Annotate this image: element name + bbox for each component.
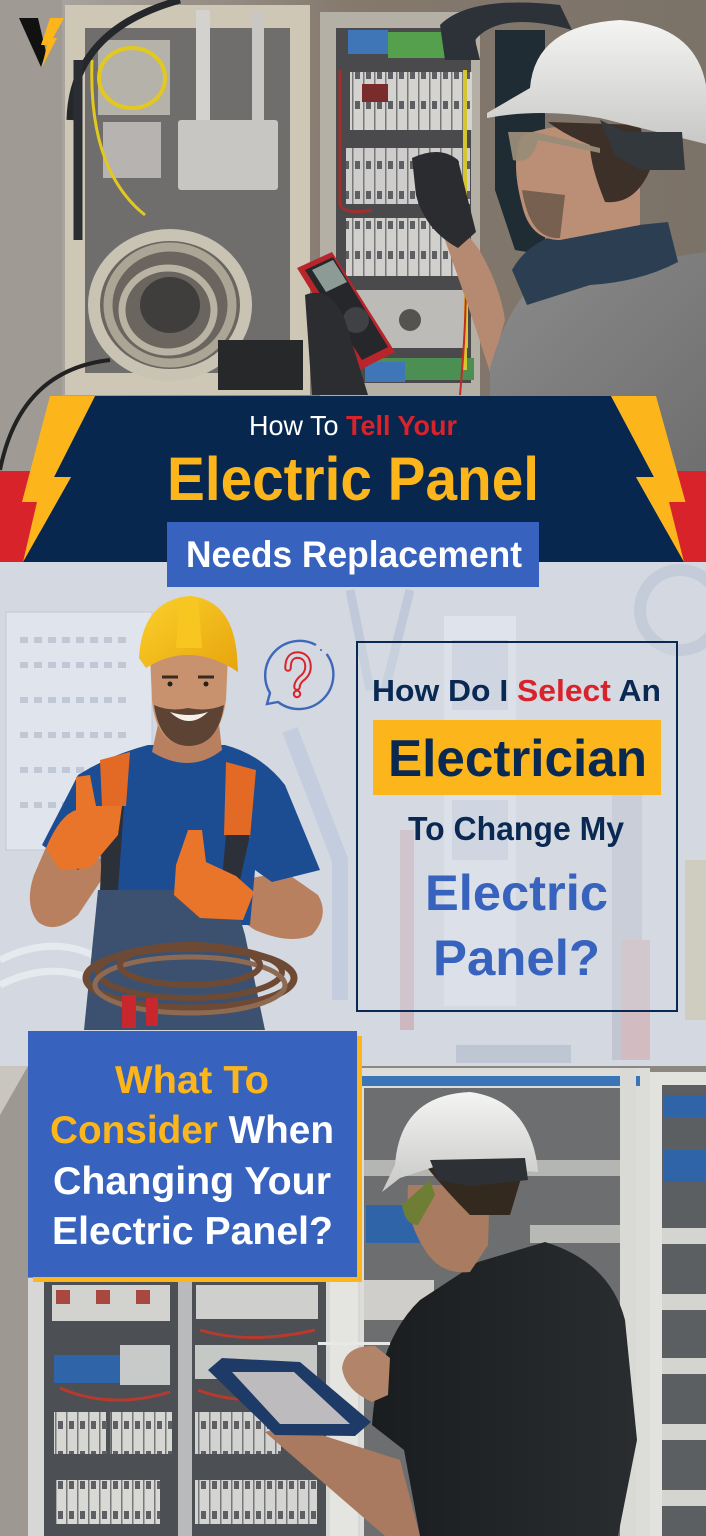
shirt — [490, 252, 706, 472]
heading line: how do I select an: How Do I Select An — [372, 673, 661, 708]
white helmet — [382, 1092, 538, 1192]
white helmet — [487, 20, 706, 170]
blue t-shirt — [42, 745, 320, 925]
title line: electric panel: Electric Panel — [167, 445, 539, 513]
cable coil — [86, 945, 294, 1013]
black shirt — [372, 1242, 637, 1536]
title banner — [0, 396, 706, 587]
photo: electrician testing a panel — [0, 0, 706, 472]
worker in yellow hard hat with thumbs up — [30, 596, 323, 1030]
denim overalls — [84, 890, 265, 1030]
cabinet left with breakers — [28, 1278, 360, 1536]
black glove holding meter — [305, 293, 368, 395]
logo: V with lightning bolt — [19, 18, 64, 67]
heading line: electric: Electric — [425, 865, 608, 921]
orange straps — [100, 752, 256, 838]
dark cable duct — [440, 2, 572, 60]
tablet — [208, 1358, 371, 1436]
panel: what to consider when changing your electric panel — [28, 1031, 362, 1282]
black glove at breaker — [412, 152, 476, 248]
hair — [425, 1165, 525, 1215]
heading line: consider when: Consider When — [50, 1109, 334, 1152]
neck and face — [516, 125, 640, 240]
subtitle box: needs replacement: Needs Replacement — [186, 534, 522, 575]
highlight: electrician: Electrician — [388, 730, 647, 788]
heading line: electric panel: Electric Panel? — [52, 1210, 333, 1253]
right arm — [232, 872, 323, 939]
heading line: to change my: To Change My — [408, 810, 625, 847]
heading line: panel: Panel? — [433, 930, 600, 986]
left arm — [30, 830, 108, 927]
subtitle box: needs replacement — [167, 522, 539, 587]
eyes and brows — [162, 676, 214, 678]
neck — [152, 715, 222, 763]
multimeter — [297, 252, 395, 370]
mid section background with faint panel photo — [0, 562, 706, 1068]
red side bars — [0, 471, 706, 562]
orange glove left — [46, 775, 122, 870]
heading line: changing your: Changing Your — [53, 1160, 331, 1203]
neck and face — [408, 1185, 490, 1272]
left lightning bolt — [22, 396, 95, 562]
orange glove right — [174, 830, 254, 920]
right enclosure with breakers — [320, 12, 480, 397]
icon: question speech bubble — [265, 641, 333, 709]
title line: how to tell your: How To Tell Your — [249, 410, 457, 441]
face — [150, 655, 228, 746]
hair — [548, 122, 650, 202]
photo: electrician with tablet at switchboard — [0, 1066, 706, 1536]
safety glasses — [508, 132, 600, 161]
navy banner shape — [23, 396, 684, 562]
beard — [154, 705, 224, 746]
panel: how do I select an electrician — [357, 642, 677, 1011]
hand and pen — [318, 1342, 390, 1402]
cabinet center — [360, 1068, 650, 1536]
left enclosure — [0, 0, 310, 470]
yellow hard hat — [139, 596, 238, 672]
electrician skin arm lower — [265, 1425, 420, 1536]
cable plugs — [122, 995, 158, 1028]
right lightning bolt — [611, 396, 686, 562]
heading line: what to: What To — [115, 1059, 269, 1102]
cabinet right — [650, 1072, 706, 1536]
electrician right arm — [445, 228, 505, 372]
denim collar — [512, 222, 678, 305]
safety glasses — [402, 1180, 435, 1225]
